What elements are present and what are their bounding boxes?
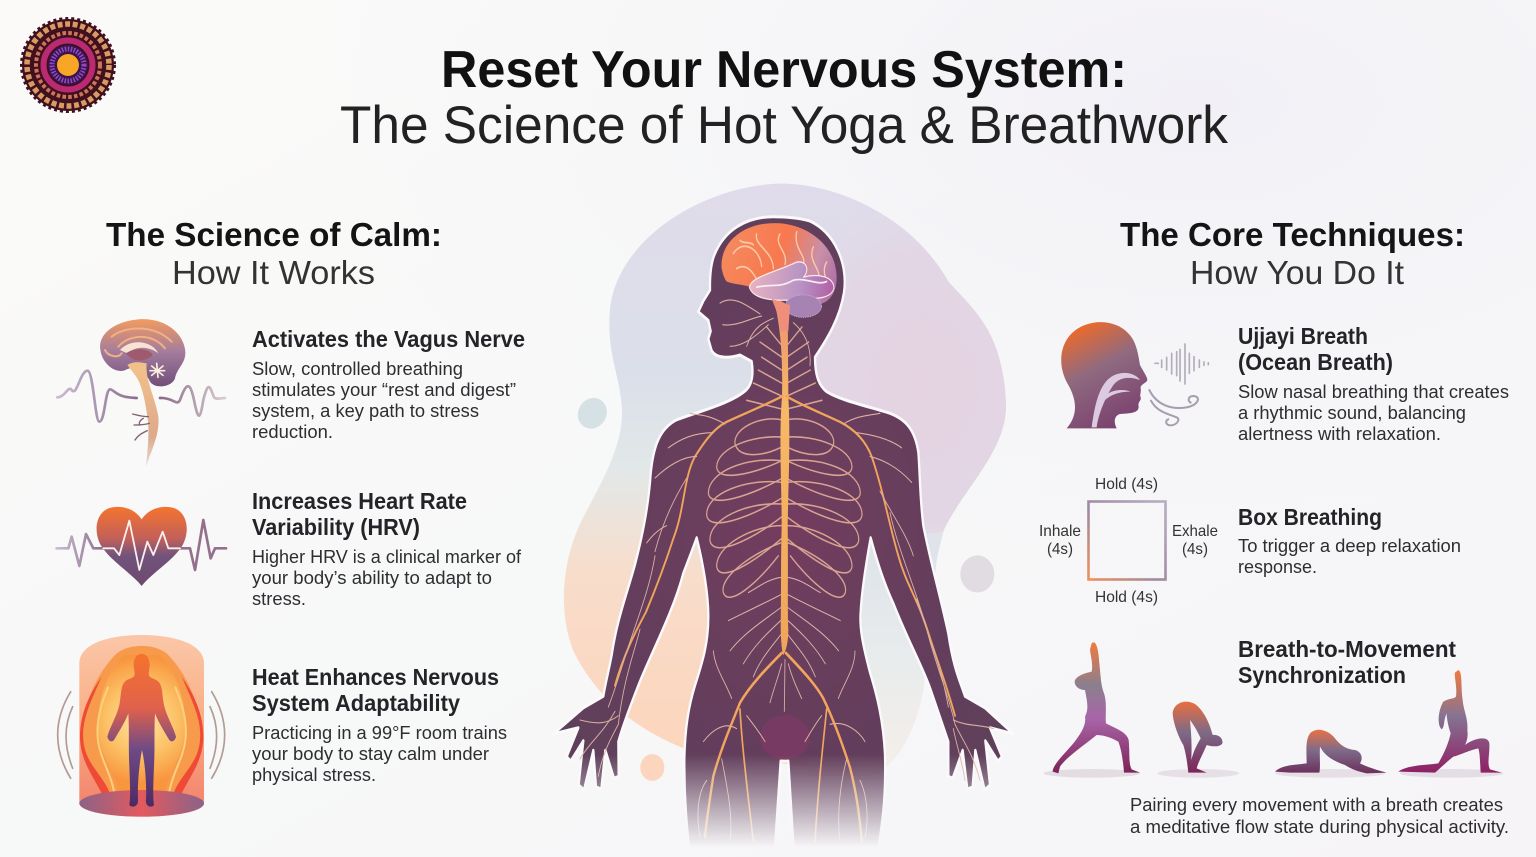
spinal cord	[776, 300, 790, 656]
text block: Ujjayi Breath: Slow nasal breathing that creates	[1238, 382, 1509, 402]
text block: Activates the Vagus Nerve: stimulates your “rest and digest”	[252, 380, 516, 400]
body with nerves	[553, 217, 1013, 857]
heading: Breath-to-Movement Synchronization	[1238, 636, 1456, 688]
diagram: box breathing: Hold (4s)	[1095, 589, 1158, 606]
pelvis shading	[760, 715, 810, 760]
text block: Increases Heart Rate Variability: Variability (HRV)	[252, 514, 420, 540]
central illustration: human nervous system	[553, 183, 1013, 857]
text block: Activates the Vagus Nerve: reduction.	[252, 422, 333, 442]
text block: Activates the Vagus Nerve: system, a key path to stress	[252, 401, 479, 421]
icon: head profile with breath and sound wave	[1061, 322, 1208, 428]
caption: pairing movement with breath: Pairing every movement with a breath creates	[1130, 795, 1503, 815]
logo: mandala	[22, 18, 114, 112]
caption: pairing movement with breath: a meditative flow state during physical activity.	[1130, 817, 1509, 837]
background blob: lower right wash	[807, 532, 943, 776]
text block: Activates the Vagus Nerve: Slow, controlled breathing	[252, 359, 463, 379]
brain: cerebellum	[785, 295, 822, 317]
background blob	[564, 183, 1006, 776]
diagram: box breathing: (4s)	[1047, 541, 1073, 558]
thin nerve branches	[580, 300, 993, 841]
heading: The Core Techniques: How You Do It	[1190, 254, 1404, 291]
brain: temporal lobe	[749, 262, 834, 300]
text block: Activates the Vagus Nerve	[252, 326, 525, 442]
text block: Box Breathing: To trigger a deep relaxation	[1238, 536, 1461, 556]
text block: Box Breathing	[1238, 504, 1461, 577]
text block: Box Breathing: response.	[1238, 557, 1317, 577]
diagram: box breathing: (4s)	[1182, 541, 1208, 558]
icon: heart with pulse	[57, 507, 226, 586]
major nerves: shoulders and arms	[615, 396, 955, 841]
background blob: lilac right wash	[780, 183, 1006, 560]
ribs	[707, 327, 783, 677]
decor: peach dot	[640, 754, 664, 781]
title: Reset Your Nervous System:	[441, 41, 1127, 99]
text block: Ujjayi Breath: a rhythmic sound, balancing	[1238, 403, 1466, 423]
text block: Heat Enhances Nervous System Adaptability: your body to stay calm under	[252, 744, 489, 764]
caption: pairing movement with breath	[1130, 795, 1509, 837]
brain: cerebrum	[722, 223, 837, 305]
heading: The Core Techniques: The Core Techniques:	[1120, 216, 1465, 253]
text block: Heat Enhances Nervous System Adaptability	[252, 664, 507, 785]
text block: Increases Heart Rate Variability: stress.	[252, 589, 306, 609]
diagram: box breathing	[1039, 476, 1218, 606]
diagram: box breathing: Inhale	[1039, 523, 1081, 540]
text block: Increases Heart Rate Variability	[252, 488, 522, 609]
heading: Breath-to-Movement Synchronization: Synchronization	[1238, 662, 1406, 688]
pose: cat stretch	[1275, 730, 1387, 778]
text block: Heat Enhances Nervous System Adaptability: Heat Enhances Nervous	[252, 664, 499, 690]
text block: Heat Enhances Nervous System Adaptability: Practicing in a 99°F room trains	[252, 723, 507, 743]
icon: body in heat chamber	[58, 635, 225, 817]
heading: Breath-to-Movement Synchronization: Breath-to-Movement	[1238, 636, 1456, 662]
text block: Ujjayi Breath: Ujjayi Breath	[1238, 323, 1368, 349]
pose: warrior	[1043, 642, 1140, 778]
heading: The Core Techniques	[1120, 216, 1465, 291]
title	[340, 41, 1228, 155]
brain stem	[772, 299, 790, 331]
text block: Increases Heart Rate Variability: Higher HRV is a clinical marker of	[252, 547, 522, 567]
ribs mirrored	[786, 327, 862, 677]
icon: brain and vagus nerve	[57, 319, 225, 467]
diagram: box breathing: Exhale	[1172, 523, 1218, 540]
diagram: box breathing: Hold (4s)	[1095, 476, 1158, 493]
text block: Ujjayi Breath	[1238, 323, 1509, 444]
text block: Ujjayi Breath: (Ocean Breath)	[1238, 349, 1393, 375]
pose: forward fold	[1158, 702, 1239, 778]
heading: The Science of Calm	[106, 216, 442, 291]
decor: blue dot	[576, 395, 609, 432]
heading: The Science of Calm: The Science of Calm:	[106, 216, 442, 253]
body silhouette	[553, 217, 1013, 857]
text block: Ujjayi Breath: alertness with relaxation.	[1238, 424, 1441, 444]
text block: Box Breathing: Box Breathing	[1238, 504, 1382, 530]
text block: Increases Heart Rate Variability: Increases Heart Rate	[252, 488, 467, 514]
text block: Increases Heart Rate Variability: your body’s ability to adapt to	[252, 568, 492, 588]
icons: yoga pose sequence	[1043, 642, 1503, 778]
pose: low lunge	[1398, 670, 1503, 778]
title: The Science of Hot Yoga & Breathwork	[340, 96, 1228, 155]
brain: gyri	[732, 231, 828, 279]
decor: mauve dot	[960, 555, 994, 593]
text block: Heat Enhances Nervous System Adaptability: System Adaptability	[252, 690, 460, 716]
text block: Heat Enhances Nervous System Adaptability: physical stress.	[252, 765, 376, 785]
heading: The Science of Calm: How It Works	[172, 254, 375, 291]
text block: Activates the Vagus Nerve: Activates the Vagus Nerve	[252, 326, 525, 352]
